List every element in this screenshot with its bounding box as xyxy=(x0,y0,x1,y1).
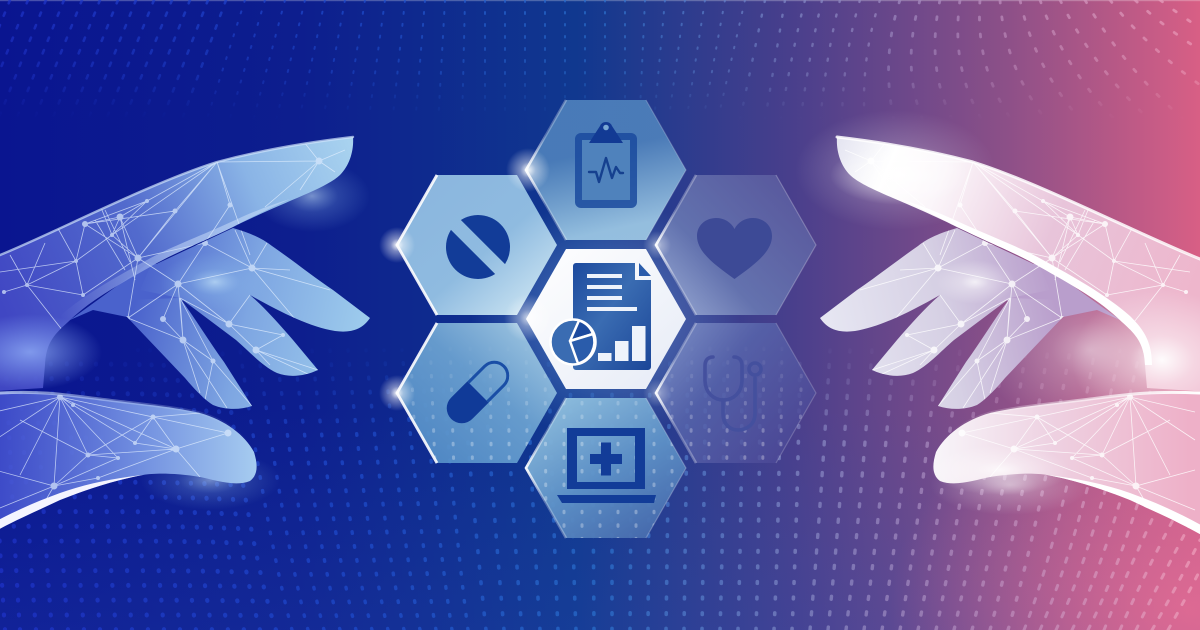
icon: heart xyxy=(697,218,772,279)
right thumb lower rim xyxy=(1047,475,1200,540)
icon: capsule xyxy=(441,356,514,429)
right fingertip glow xyxy=(830,145,970,205)
right middle finger xyxy=(820,228,1050,332)
icon: stethoscope xyxy=(705,357,761,430)
icon: report document with charts xyxy=(550,263,651,370)
left palm glow xyxy=(0,314,102,390)
right palm glow xyxy=(1072,290,1200,430)
hexagon: clipboard xyxy=(526,100,686,240)
hexagon: capsule xyxy=(396,322,557,464)
left ring finger xyxy=(170,280,318,376)
left thumb xyxy=(0,392,257,540)
hexagon: stethoscope xyxy=(654,322,816,464)
vertex glow: center hexagon xyxy=(504,294,552,342)
right hand rim highlights xyxy=(837,137,1200,452)
left back of hand xyxy=(70,262,250,320)
vertex glow: capsule hexagon xyxy=(379,375,415,411)
hexagon: pill tablet xyxy=(397,175,557,315)
right thumb glow xyxy=(930,445,1070,495)
hexagon: heart xyxy=(656,175,816,315)
vertex glow: clipboard hexagon xyxy=(506,148,550,192)
pie chart xyxy=(550,320,596,364)
right little finger xyxy=(938,298,1063,409)
right finger joint glow xyxy=(935,260,1015,304)
left finger joint glow xyxy=(160,252,270,312)
right thumb xyxy=(933,392,1200,540)
vertex glow: tablet hexagon xyxy=(379,227,415,263)
right back of hand xyxy=(940,262,1120,320)
left index lower edge band xyxy=(38,199,290,365)
right index lower edge band xyxy=(900,199,1152,365)
left thumb lower rim xyxy=(0,475,143,540)
right hand network xyxy=(845,137,1195,510)
left hand network xyxy=(0,137,345,510)
ambient glows behind hands xyxy=(140,110,1200,515)
dot field: bottom xyxy=(0,350,1200,630)
right index finger and palm xyxy=(837,137,1200,392)
vertex glow: heart hexagon xyxy=(643,231,671,259)
left middle finger xyxy=(140,228,370,332)
vertex glow: stethoscope hexagon xyxy=(643,379,671,407)
hexagon: laptop xyxy=(524,398,686,538)
icon: laptop with medical cross xyxy=(557,428,656,503)
icon: clipboard with pulse xyxy=(575,122,637,208)
dot field: top xyxy=(0,0,1200,108)
icon: split tablet xyxy=(446,215,510,279)
left hand rim highlights xyxy=(0,137,353,452)
left little finger xyxy=(127,298,252,409)
left hand xyxy=(0,137,370,540)
right hand xyxy=(820,137,1200,540)
center glow xyxy=(471,199,741,439)
left index finger and palm xyxy=(0,137,353,392)
hexagon cluster xyxy=(379,100,816,540)
hexagon: central report xyxy=(526,249,686,389)
right ring finger xyxy=(872,280,1020,376)
